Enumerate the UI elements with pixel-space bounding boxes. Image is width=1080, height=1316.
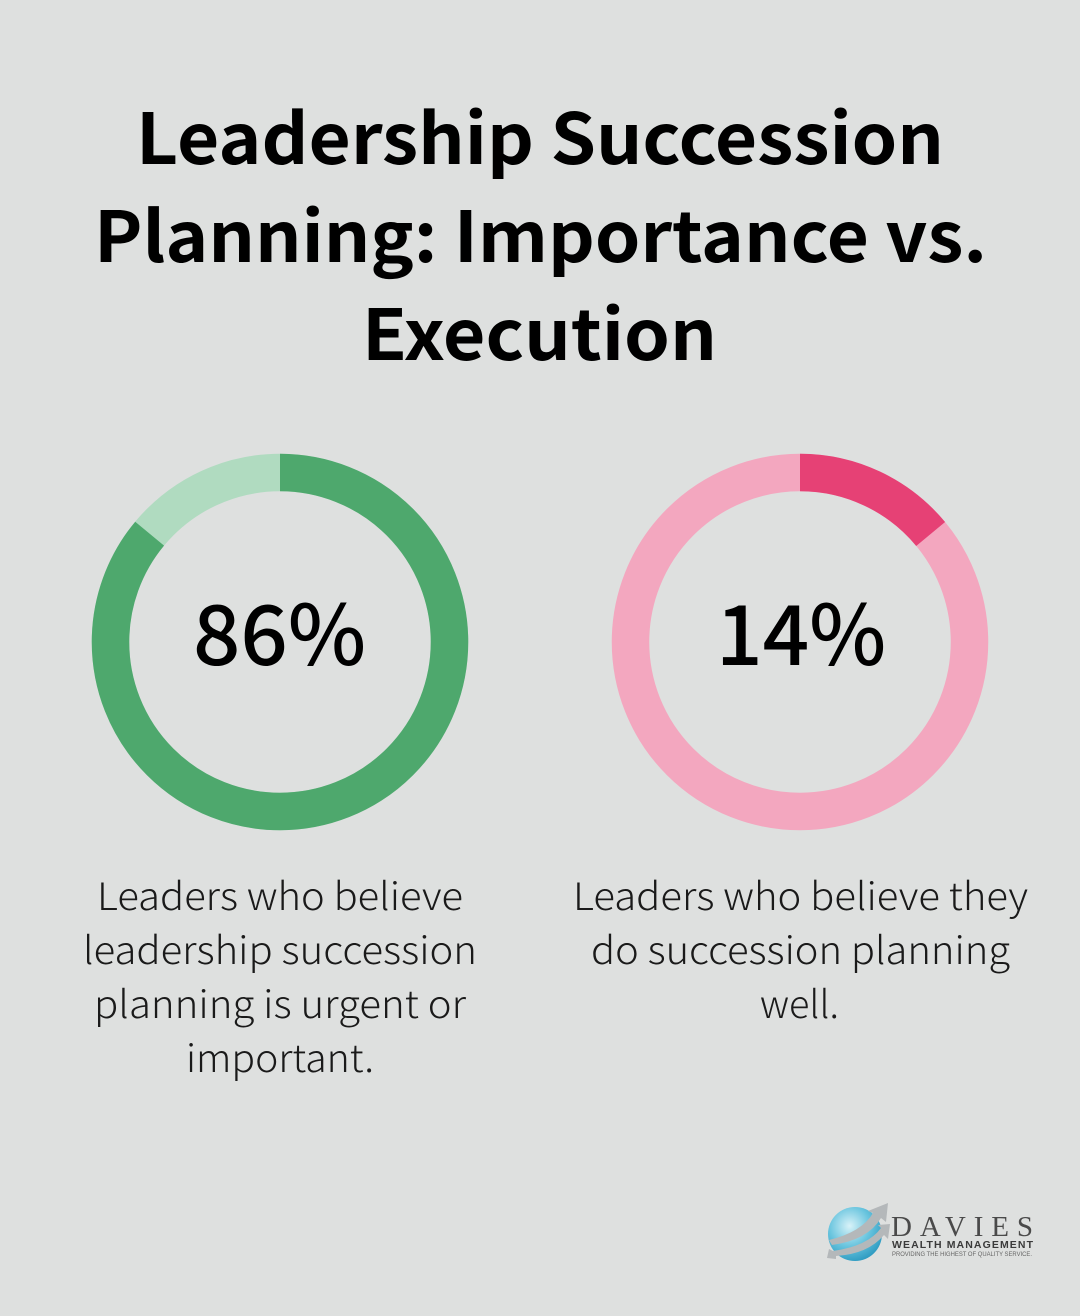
logo wordmark: DAVIES [891, 1211, 1033, 1243]
stat: 86%: 86% [193, 569, 366, 689]
donut chart: 86% [110, 472, 450, 812]
title: Planning: Importance vs. [94, 182, 987, 283]
description: 86%: important. [186, 1028, 374, 1083]
description: 86%: leadership succession [83, 920, 477, 975]
logo subtitle: WEALTH MANAGEMENT [892, 1239, 1034, 1251]
donut chart: 14% [630, 472, 970, 812]
description: 86%: Leaders who believe [97, 866, 463, 921]
title: Leadership Succession [136, 84, 944, 185]
logo: Davies Wealth Management [827, 1203, 1034, 1261]
title [94, 84, 987, 381]
icon: globe with arrows [827, 1203, 890, 1261]
description: 14%: do succession planning [591, 920, 1010, 975]
description: 14% [573, 866, 1028, 1029]
description: 14%: Leaders who believe they [573, 866, 1028, 921]
description: 86%: planning is urgent or [94, 974, 466, 1029]
panel: 86% believe it is important [83, 472, 477, 1083]
description: 14%: well. [760, 974, 839, 1029]
logo tagline: PROVIDING THE HIGHEST OF QUALITY SERVICE. [892, 1251, 1032, 1258]
stat: 14%: 14% [716, 569, 886, 689]
title: Execution [362, 280, 717, 381]
description: 86% [83, 866, 477, 1083]
panel: 14% believe they do it well [573, 472, 1028, 1029]
